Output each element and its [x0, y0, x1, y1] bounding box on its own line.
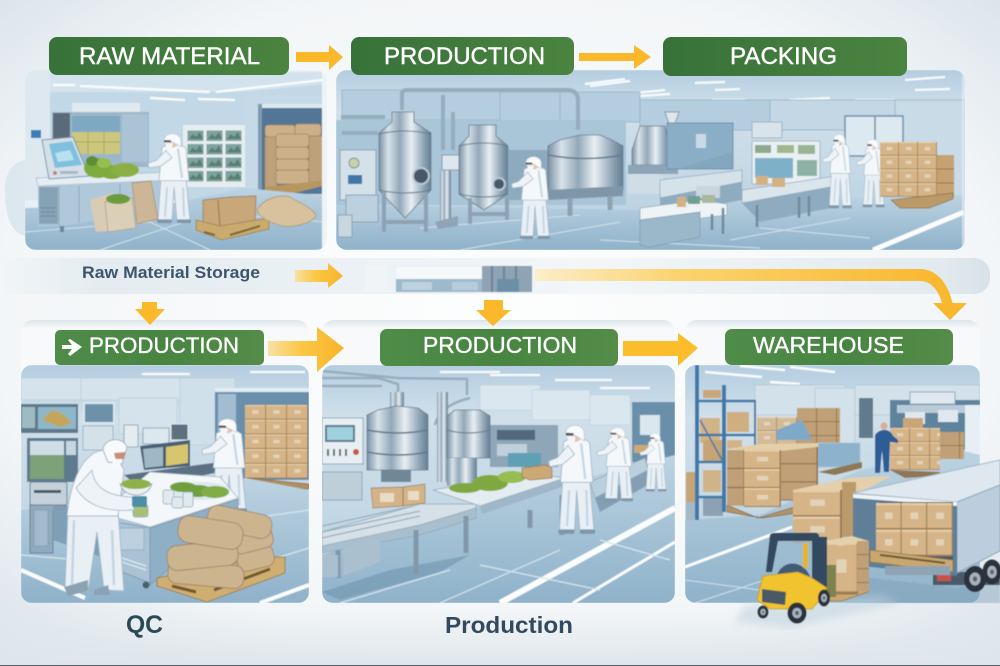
- caption: raw material storage: Raw Material Storage: [82, 264, 260, 282]
- long curved arrow to warehouse: [535, 269, 967, 320]
- back wall panels: [336, 90, 965, 205]
- arrow: raw material to production: [296, 45, 343, 70]
- counter: [36, 172, 170, 232]
- lower backdrop shading: [0, 603, 1000, 665]
- floor: [322, 455, 675, 603]
- forklift operator: [776, 563, 810, 586]
- arrow: down to QC: [135, 302, 165, 325]
- heading: warehouse: [725, 329, 953, 365]
- far doorway: [632, 402, 675, 462]
- arrow: QC to production: [268, 327, 344, 372]
- heading: warehouse: WAREHOUSE: [753, 332, 904, 358]
- arrow: production to warehouse: [623, 333, 698, 366]
- wall monitors: [21, 403, 114, 450]
- forklift yellow body: [757, 572, 827, 609]
- packing workers: [823, 135, 852, 208]
- wall monitor with field view: [27, 438, 78, 482]
- tank A: [367, 392, 428, 482]
- vertical column: [435, 155, 462, 229]
- soft backdrop shape: [5, 160, 25, 236]
- heading: raw material: RAW MATERIAL: [79, 43, 260, 70]
- overhead pipes: [322, 371, 470, 425]
- caption: production: Production: [445, 612, 573, 638]
- floor: [685, 450, 980, 603]
- forklift window tint: [772, 541, 812, 578]
- heading: line production: [380, 329, 618, 366]
- forklift and truck wheels overflowing panel: [735, 533, 900, 628]
- tank B: [437, 392, 490, 486]
- ceiling lights: [705, 366, 835, 384]
- strip thumbnail of factory: [366, 266, 532, 292]
- control panel: [322, 418, 363, 464]
- back wall: [755, 385, 980, 450]
- printer cart: [30, 482, 110, 560]
- trailer body: [853, 460, 1000, 576]
- storage rack: [686, 365, 755, 520]
- caption: QC: QC: [126, 611, 163, 639]
- ceiling strip lights: [142, 372, 305, 374]
- sorting table with greens: [433, 471, 565, 535]
- wall side block: [245, 95, 327, 195]
- panel: raw material scene: [25, 70, 328, 250]
- palletised cartons: [880, 142, 954, 208]
- glass machine: [667, 123, 733, 169]
- plant shelf: [183, 125, 245, 187]
- rear stacks: [890, 418, 964, 478]
- process machine: [490, 425, 558, 467]
- operator far: [640, 433, 667, 491]
- ceiling: [50, 72, 327, 100]
- heading: packing: [663, 37, 907, 76]
- heading: production: PRODUCTION: [384, 43, 545, 70]
- tank 4 on stand: [628, 112, 679, 194]
- kiosk terminal: [42, 137, 89, 179]
- panel: QC scene: [21, 365, 309, 603]
- cold room with sacks: [258, 104, 327, 194]
- floor: [25, 188, 327, 250]
- tank 1: [379, 112, 431, 232]
- panel: warehouse scene: [685, 365, 980, 603]
- loading bay: [859, 392, 980, 458]
- control panels left: [338, 150, 378, 237]
- forklift wheels: [758, 590, 830, 624]
- roller conveyor: [322, 504, 476, 578]
- heading: production: [351, 37, 574, 75]
- panel: production line scene: [322, 365, 675, 603]
- window: [845, 116, 903, 156]
- truck chassis and wheels: [933, 560, 1000, 592]
- operator large: [549, 425, 595, 534]
- heading: raw material: [49, 37, 289, 75]
- sacks of raw material: [90, 181, 158, 232]
- worker in blue: [875, 422, 898, 473]
- main carton stack: [727, 443, 818, 518]
- leafy greens: [84, 156, 139, 179]
- pallet boxes and sack: [196, 196, 316, 240]
- heading: packing: PACKING: [730, 43, 837, 70]
- ceiling lights: [440, 372, 650, 388]
- middle conveyor: [659, 169, 743, 206]
- heading: line production: PRODUCTION: [423, 332, 577, 358]
- bottom edge line: [0, 665, 1000, 666]
- tank 3: [547, 134, 624, 216]
- operator mid: [597, 428, 633, 501]
- QC inspector: [64, 440, 147, 596]
- load on forks: [824, 536, 869, 601]
- cold room and cartons: [215, 388, 309, 489]
- arrow: storage flow: [295, 263, 343, 288]
- sliver over seam: [962, 70, 965, 250]
- display cabinet: [752, 122, 820, 184]
- packing conveyor: [742, 176, 836, 227]
- flow strip band: [0, 258, 990, 294]
- panel card: QC: [21, 320, 309, 380]
- panel: production and packing scene: [336, 70, 965, 250]
- wall panels: [480, 385, 630, 425]
- floor: [21, 478, 309, 603]
- badge square: [31, 130, 41, 138]
- background console: [508, 150, 548, 200]
- worker at counter: [148, 134, 191, 223]
- right fade: [322, 72, 328, 250]
- arrow: production to packing: [579, 45, 651, 69]
- forklift grille: [762, 589, 786, 605]
- pipework: [341, 90, 578, 150]
- back wall panels: [21, 378, 235, 445]
- forklift yellow post: [803, 543, 808, 568]
- storage cabinet: [52, 103, 149, 167]
- panel card: warehouse: [685, 320, 980, 380]
- second packing worker: [857, 139, 885, 207]
- right technician: [202, 419, 247, 512]
- far stacks: [757, 408, 840, 450]
- front table: [640, 195, 727, 247]
- truck: [845, 460, 1000, 603]
- cartons on conveyor: [371, 484, 425, 508]
- tray of greens: [170, 482, 230, 500]
- heading: QC production: PRODUCTION: [89, 333, 239, 358]
- operator at tanks: [512, 157, 550, 239]
- sacks on pallet: [157, 503, 285, 602]
- tank 2: [459, 125, 508, 224]
- back wall: [50, 75, 327, 200]
- ceiling lights: [585, 77, 950, 100]
- far conveyor: [590, 445, 648, 512]
- arrow: down to production: [476, 300, 511, 326]
- truck shadow: [845, 570, 1000, 603]
- floor shadow: [735, 595, 900, 628]
- side cabinet: [322, 472, 362, 500]
- carton on table: [522, 465, 552, 480]
- lab monitors: [124, 424, 220, 488]
- carton stack by truck: [793, 476, 892, 543]
- sample jars: [133, 490, 193, 517]
- forklift mast: [824, 565, 836, 597]
- floor: [336, 195, 964, 250]
- bowl of greens: [120, 479, 152, 495]
- heading: QC production: [55, 330, 264, 365]
- wrapped pallet: [818, 443, 862, 475]
- QC table: [100, 472, 238, 588]
- forklift cab: [766, 533, 827, 594]
- panel card: production line: [322, 320, 675, 380]
